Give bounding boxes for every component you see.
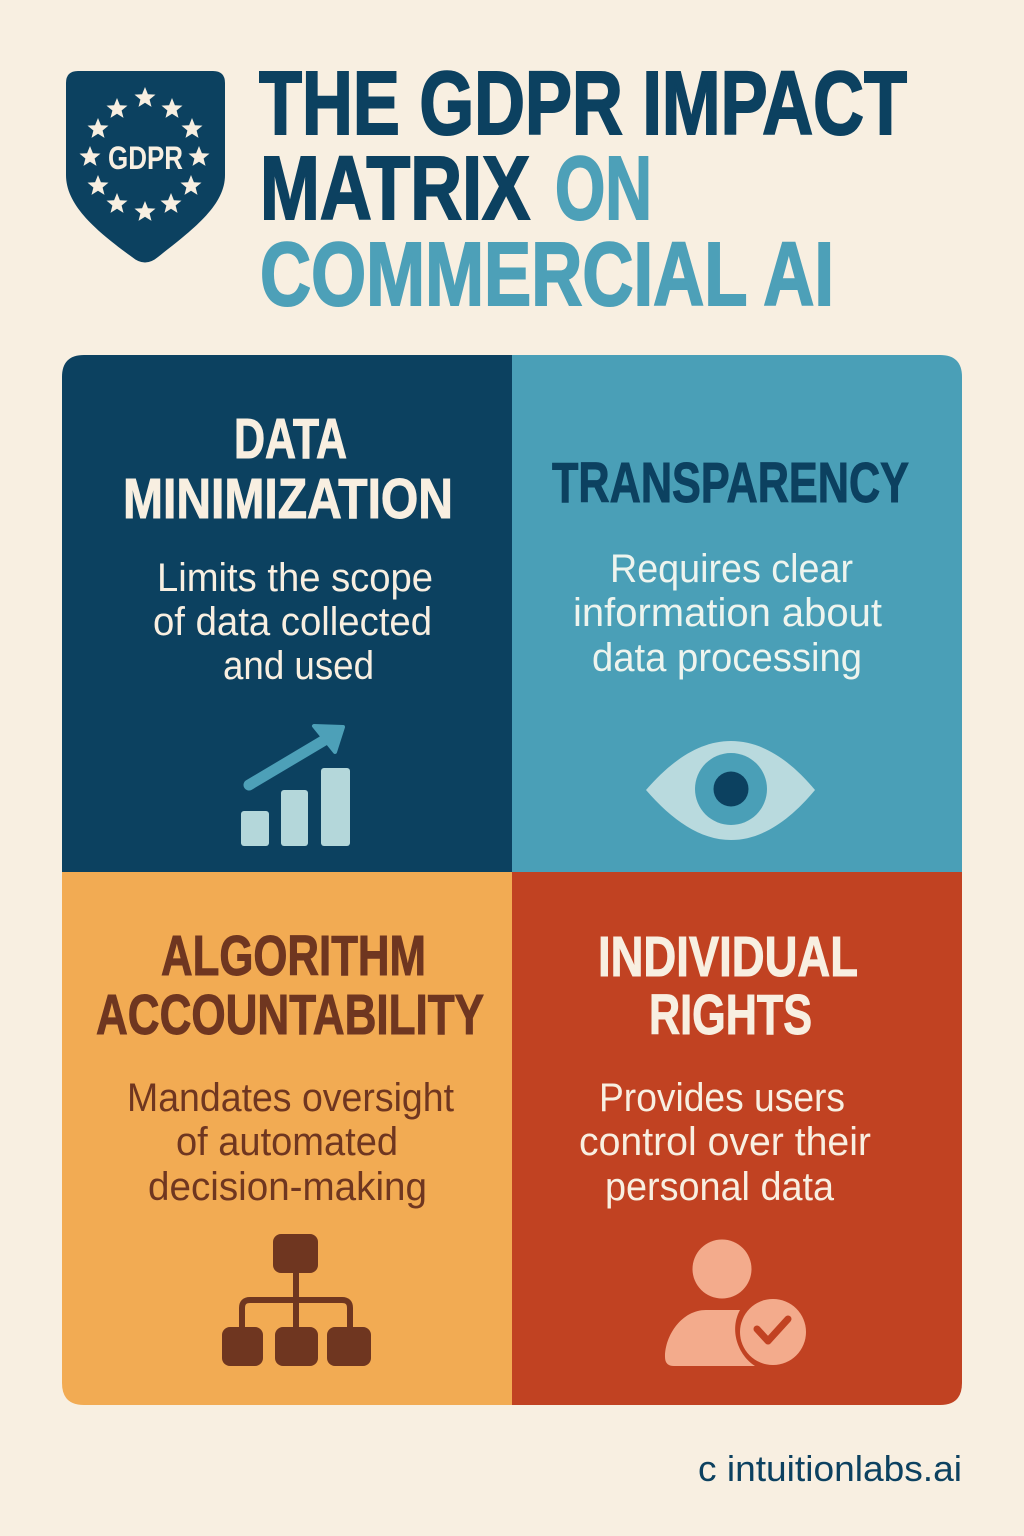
panel: individual rights [512, 872, 962, 1405]
heading: individual rights: RIGHTS [649, 983, 812, 1047]
text: individual rights description: personal data [605, 1165, 835, 1209]
title: ON [555, 139, 652, 239]
title: MATRIX [260, 139, 530, 239]
icon: GDPR shield with stars: GDPR [108, 140, 183, 176]
heading: algorithm accountability: ALGORITHM [161, 924, 426, 988]
text: algorithm accountability description: of automated [176, 1120, 398, 1164]
icon: eye [646, 741, 815, 840]
text: algorithm accountability description [127, 1076, 454, 1209]
text: transparency description: Requires clear [610, 547, 853, 591]
text: algorithm accountability description: decision-making [148, 1165, 427, 1209]
footer credit: c intuitionlabs.ai [698, 1448, 962, 1489]
heading: algorithm accountability [96, 924, 484, 1047]
title [259, 54, 907, 325]
heading: data minimization: MINIMIZATION [123, 467, 453, 531]
title: COMMERCIAL AI [260, 225, 834, 325]
text: individual rights description: control over their [579, 1120, 871, 1164]
text: transparency description: data processing [592, 636, 862, 680]
panel: algorithm accountability [62, 872, 512, 1405]
icon: rising bar chart with arrow [241, 726, 350, 846]
text: data minimization description: and used [223, 644, 374, 688]
icon: person with check badge [665, 1240, 806, 1366]
text: transparency description [573, 547, 882, 680]
heading: individual rights: INDIVIDUAL [598, 925, 858, 989]
text: transparency description: information about [573, 591, 882, 635]
text: data minimization description [153, 556, 433, 688]
text: individual rights description: Provides users [599, 1076, 845, 1120]
panel: transparency [512, 355, 962, 872]
heading: data minimization: DATA [234, 407, 347, 471]
text: algorithm accountability description: Mandates oversight [127, 1076, 454, 1120]
text: data minimization description: Limits the scope [157, 556, 433, 600]
heading: transparency: TRANSPARENCY [552, 451, 909, 515]
icon: hierarchy diagram [222, 1234, 371, 1366]
panel: data minimization [62, 355, 512, 872]
heading: algorithm accountability: ACCOUNTABILITY [96, 983, 484, 1047]
heading: data minimization [123, 407, 453, 531]
text: data minimization description: of data collected [153, 600, 432, 644]
text: individual rights description [579, 1076, 871, 1209]
heading: individual rights [598, 925, 858, 1047]
icon: GDPR shield with stars [66, 71, 225, 262]
